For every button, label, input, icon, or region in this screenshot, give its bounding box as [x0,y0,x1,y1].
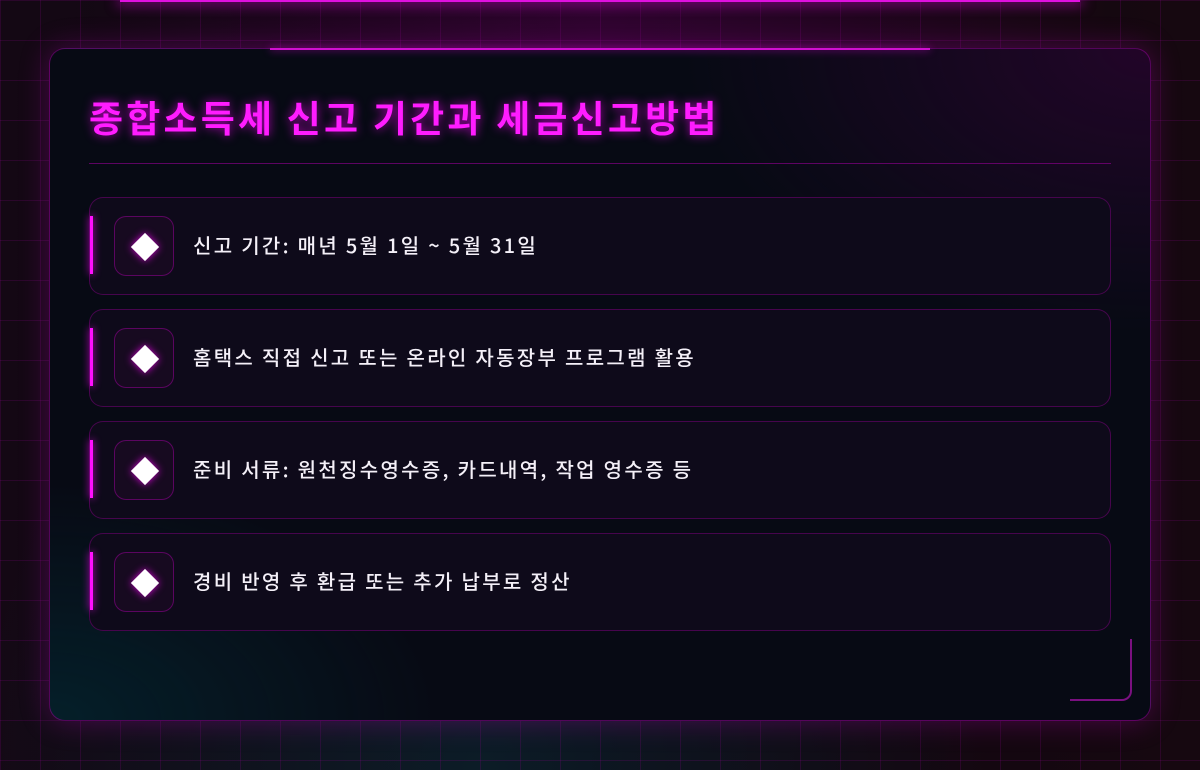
text: 경비 반영 후 환급 또는 추가 납부로 정산 [193,566,572,595]
text: 준비 서류: 원천징수영수증, 카드내역, 작업 영수증 등 [193,454,693,483]
item 1 [89,197,1111,295]
corner bracket [1070,639,1132,701]
icon: diamond [114,216,174,276]
icon: diamond [114,440,174,500]
item 2 [89,309,1111,407]
top glow line [120,0,1080,2]
title: 종합소득세 신고 기간과 세금신고방법 [89,89,720,143]
icon: diamond [114,328,174,388]
text: 홈택스 직접 신고 또는 온라인 자동장부 프로그램 활용 [193,342,696,371]
item 4 [89,533,1111,631]
item 3 [89,421,1111,519]
text: 신고 기간: 매년 5월 1일 ~ 5월 31일 [193,230,538,259]
icon: diamond [114,552,174,612]
